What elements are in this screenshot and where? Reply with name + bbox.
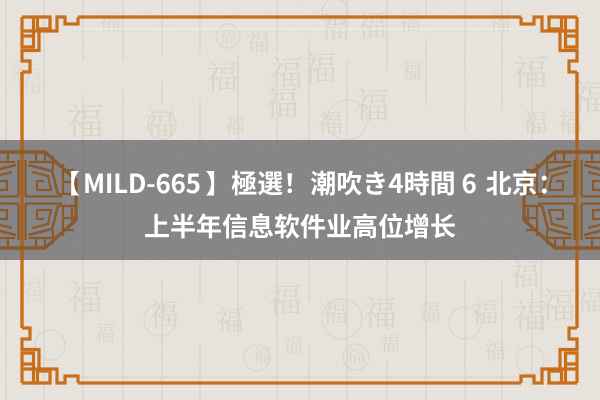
paper background with faint fu characters and vertical lines: 福	[206, 52, 238, 98]
paper background with faint fu characters and vertical lines: 福	[216, 299, 244, 339]
title: 【MILD-665】極選！潮吹き4時間 6 北京：	[54, 164, 564, 201]
title	[54, 164, 564, 244]
paper background with faint fu characters and vertical lines: 福	[419, 296, 441, 327]
paper background with faint fu characters and vertical lines: 福	[225, 109, 245, 138]
paper background with faint fu characters and vertical lines: 福	[149, 290, 179, 334]
paper background with faint fu characters and vertical lines: 福	[268, 273, 302, 322]
paper background with faint fu characters and vertical lines: 福	[246, 22, 270, 57]
paper background with faint fu characters and vertical lines: 福	[489, 6, 511, 37]
paper background with faint fu characters and vertical lines: 福	[67, 270, 103, 321]
paper background with faint fu characters and vertical lines: 福	[320, 3, 350, 47]
paper background with faint fu characters and vertical lines: 福	[283, 329, 303, 358]
paper background with faint fu characters and vertical lines: 福	[363, 286, 397, 335]
paper background with faint fu characters and vertical lines: 福	[484, 334, 506, 365]
grey title band	[0, 140, 600, 260]
frame line: bottom	[78, 381, 521, 385]
corner ornament: top right	[521, 17, 577, 72]
paper background with faint fu characters and vertical lines: 福	[357, 1, 387, 45]
corner ornament: bottom right	[521, 328, 577, 383]
paper background with faint fu characters and vertical lines: 福	[9, 56, 31, 87]
paper background with faint fu characters and vertical lines: 福	[510, 250, 540, 294]
paper background with faint fu characters and vertical lines: 福	[513, 289, 547, 338]
paper background with faint fu characters and vertical lines: 福	[354, 78, 390, 129]
paper background with faint fu characters and vertical lines: 福	[512, 45, 548, 96]
paper background with faint fu characters and vertical lines: 福	[265, 76, 299, 125]
paper background with faint fu characters and vertical lines: 福	[399, 6, 421, 37]
frame line: right	[575, 72, 579, 328]
medallion: left lattice octagon	[0, 152, 76, 248]
title: 上半年信息软件业高位增长	[144, 207, 456, 244]
paper background with faint fu characters and vertical lines: 福	[145, 100, 175, 144]
paper background with faint fu characters and vertical lines: 福	[380, 327, 400, 356]
paper background with faint fu characters and vertical lines: 福	[269, 46, 303, 95]
paper background with faint fu characters and vertical lines: 福	[402, 55, 422, 84]
medallion: right lattice octagon	[524, 152, 600, 248]
corner ornament: top left	[22, 17, 78, 72]
paper background with faint fu characters and vertical lines: 福	[16, 269, 44, 309]
paper background with faint fu characters and vertical lines: 福	[471, 291, 499, 331]
paper background with faint fu characters and vertical lines: 福	[317, 103, 343, 140]
paper background with faint fu characters and vertical lines: 福	[253, 342, 271, 368]
paper background with faint fu characters and vertical lines: 福	[346, 339, 366, 368]
paper background with faint fu characters and vertical lines: 福	[13, 57, 43, 101]
paper background with faint fu characters and vertical lines: 福	[95, 317, 115, 346]
paper background with faint fu characters and vertical lines: 福	[322, 293, 348, 330]
frame band shade	[22, 140, 577, 260]
paper background with faint fu characters and vertical lines: 福	[66, 91, 104, 146]
frame line: top	[78, 15, 521, 19]
paper background with faint fu characters and vertical lines: 福	[303, 41, 337, 90]
corner ornament: bottom left	[22, 328, 78, 383]
paper background with faint fu characters and vertical lines: 福	[219, 22, 237, 48]
paper background with faint fu characters and vertical lines: 福	[522, 103, 548, 140]
paper background with faint fu characters and vertical lines: 福	[557, 103, 583, 140]
paper background with faint fu characters and vertical lines: 福	[540, 278, 576, 329]
paper background with faint fu characters and vertical lines: 福	[99, 6, 121, 37]
frame line: left	[20, 72, 24, 328]
